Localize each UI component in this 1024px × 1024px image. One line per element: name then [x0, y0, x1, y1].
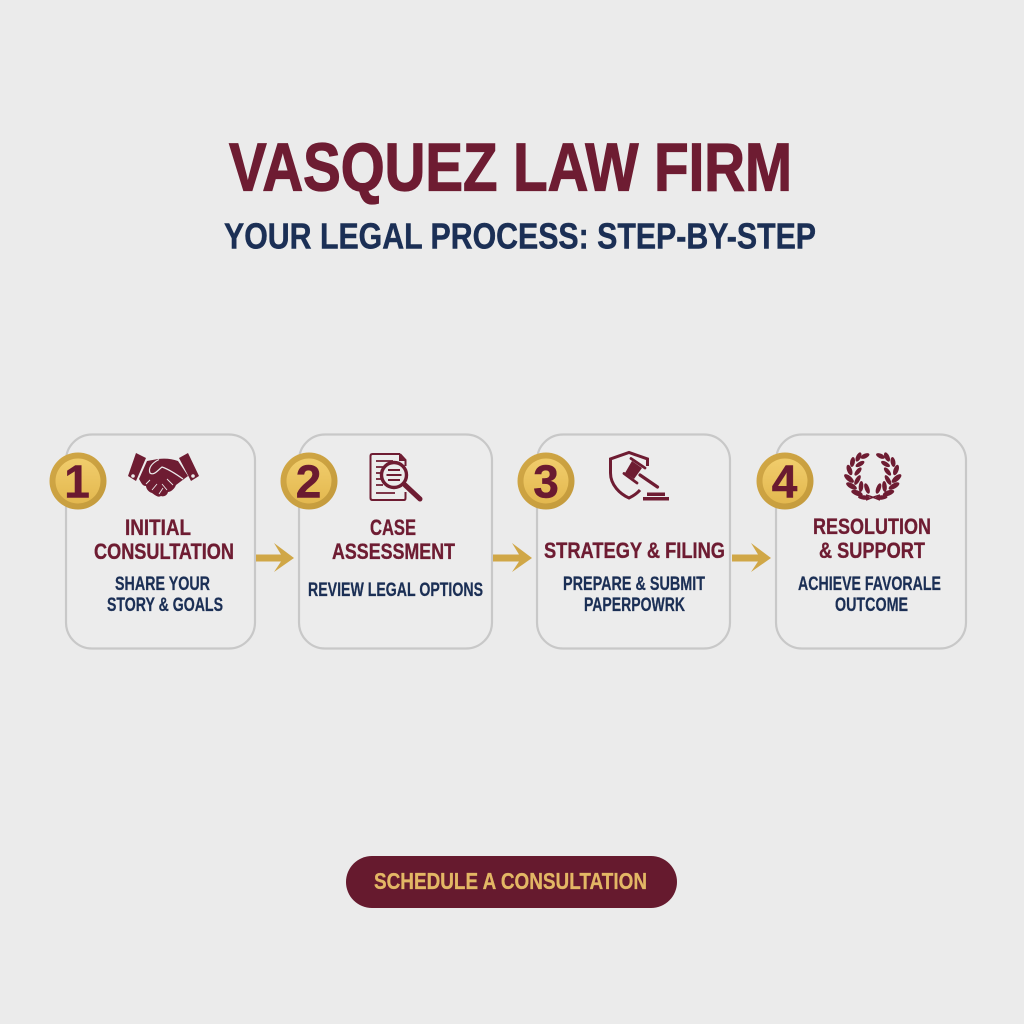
- step 1 description: STORY & GOALS: [107, 595, 223, 616]
- badge: number 4: 4: [772, 456, 798, 508]
- badge: number 1: 1: [64, 456, 90, 508]
- step 2 description: REVIEW LEGAL OPTIONS: [308, 580, 483, 601]
- badge: number 3: 3: [533, 456, 559, 508]
- step 3 description: [563, 574, 705, 616]
- step 4 description: OUTCOME: [835, 595, 908, 616]
- step 3 description: PREPARE & SUBMIT: [563, 574, 705, 595]
- step 2 heading: [332, 515, 455, 564]
- icon: handshake: [128, 453, 199, 497]
- badge: number 1: [50, 452, 106, 510]
- call to action button: SCHEDULE A CONSULTATION: [374, 868, 647, 894]
- step 4 heading: RESOLUTION: [813, 514, 931, 539]
- step 1 description: SHARE YOUR: [115, 574, 210, 595]
- step 1 heading: [94, 515, 234, 564]
- step 4 heading: [813, 514, 931, 563]
- step 2 heading: ASSESSMENT: [332, 539, 455, 564]
- arrow: step 1 to step 2: [256, 543, 294, 572]
- step 2 heading: CASE: [370, 515, 416, 540]
- icon: document with magnifier: [370, 454, 420, 500]
- step 3 description: PAPERPOWRK: [584, 595, 685, 616]
- badge: number 4: [756, 452, 814, 510]
- step 1 description: [107, 574, 223, 616]
- title: VASQUEZ LAW FIRM: [229, 130, 792, 206]
- step 1 heading: INITIAL: [125, 515, 191, 540]
- step 4 heading: & SUPPORT: [819, 538, 925, 563]
- icon: laurel wreath: [843, 451, 903, 500]
- badge: number 3: [518, 452, 574, 510]
- arrow: step 3 to step 4: [732, 543, 771, 572]
- step 1 heading: CONSULTATION: [94, 539, 234, 564]
- step 4 description: [798, 574, 941, 616]
- step 3 heading: STRATEGY & FILING: [544, 538, 725, 563]
- badge: number 2: [280, 452, 338, 510]
- panel: step 2 case assessment: [280, 434, 492, 648]
- step 4 description: ACHIEVE FAVORALE: [798, 574, 941, 595]
- panel: step 1 initial consultation: [50, 434, 255, 648]
- icon: shield and gavel: [610, 452, 669, 500]
- call to action button: [346, 856, 677, 908]
- panel: step 4 resolution and support: [756, 434, 966, 648]
- subtitle: YOUR LEGAL PROCESS: STEP-BY-STEP: [224, 216, 816, 256]
- arrow: step 2 to step 3: [493, 543, 532, 572]
- panel: step 3 strategy and filing: [518, 434, 730, 648]
- badge: number 2: 2: [296, 456, 321, 508]
